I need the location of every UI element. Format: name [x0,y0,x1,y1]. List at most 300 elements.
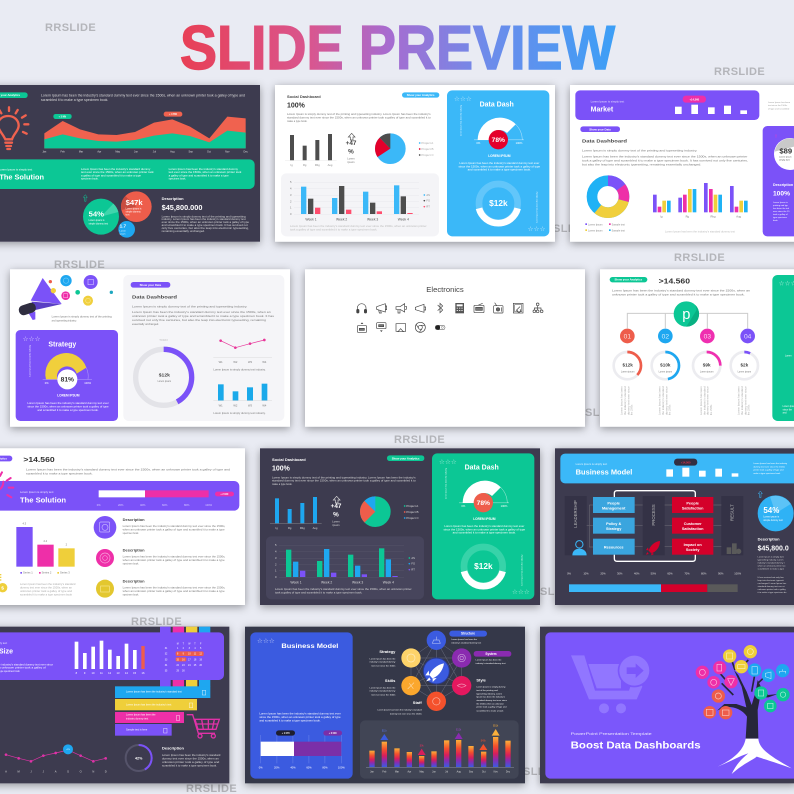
vertical captions: Lorem Ipsum has been [738,385,741,415]
body text: but also the leap into electronic typesetting, remaining essentially unchanged. [582,162,702,166]
process diagram: Strategy [606,527,622,531]
process diagram: People [607,501,620,505]
stat and description: when an unknown printer too [758,565,786,568]
pie legend [419,141,434,157]
area chart: Jul [153,150,156,153]
grouped bar chart: Lorem Ipsum has been the industry's standard dummy text [665,230,735,233]
banner: the solution: 0% [97,503,101,507]
grouped bar panel: RT [411,568,415,572]
bubble chart: text [126,213,130,216]
banner: the solution: 100% [205,503,213,507]
intro text: unknown printer took a galley of type and scrambled it to make a type specimen book. [612,292,745,296]
area chart: Nov [225,150,230,153]
bubble chart [83,191,152,238]
percent scale: 60% [667,572,673,576]
cover title [571,731,701,751]
cover title: Boost Data Dashboards [571,740,701,751]
stacked bar chart: Mar [395,770,399,773]
network labels: typesetting industry. Lorem [476,692,502,695]
panel: slide 10 market size [0,627,229,783]
panel: description purple: $89 [779,147,792,156]
bar chart: 12 [108,671,112,675]
calendar: 9 [183,654,185,656]
heading: Social Dashboard [272,457,306,462]
panel: slide 7 the solution light [0,448,245,605]
calendar: 29 [176,671,180,673]
stat: +47% [346,133,357,164]
vertical captions: the 1500s [748,404,751,415]
stat and description: Lorem ipsum is [763,516,780,519]
banner: market: +14,560 [689,97,700,101]
percent scale [567,572,742,576]
org tree: 03 [704,333,711,340]
banner: the solution: 80% [184,503,190,507]
grouped bar panel: AS [426,193,430,197]
panel: slide 5 electronics icons [305,269,585,427]
banner: the solution: text ever since the 1500s, when an unknown printer took [169,171,242,174]
network labels: Lorem Ipsum has been the [476,658,502,661]
stacked bar chart: Dec [506,771,511,773]
grouped bar panel: Week 2 [321,580,332,584]
panel: blue business model: since the 1500s, when an unknown printer took a galley of type [259,716,341,719]
banner: business model: Business Model [576,470,632,477]
ring charts: $12k [622,362,633,367]
icon: coin: $ [1,586,4,592]
percent scale: 100% [734,572,742,576]
donut legend: Sample text [612,223,625,226]
cover title: PowerPoint Presentation Template [571,731,653,736]
megaphone caption [52,316,112,322]
stacked bar chart: Oct [482,770,486,773]
process diagram [565,491,743,561]
banner: business model [560,454,794,483]
heading: 14.560: >14.560 [23,455,55,464]
percent scale: 30% [617,572,623,576]
grouped bar panel: Week 4 [383,580,394,584]
description: only five centuries, but also the leap into electronic typesetting, [162,227,249,230]
calendar: F [200,643,202,645]
banner: the solution: The Solution [20,497,66,504]
bar chart small [285,134,337,167]
calendar tabs [160,627,210,687]
grouped bar panel: Week 3 [367,217,378,221]
area chart: Apr [97,150,101,153]
bar chart: 9 [84,671,86,675]
calendar: 35 [165,671,168,673]
bubble chart: simple dummy text [89,222,108,225]
calendar: 16 [182,659,185,661]
ring charts: $9k [703,362,711,367]
process diagram: People [686,501,699,505]
stacked bar chart: $9k [420,745,424,747]
ring: 42% [126,745,152,771]
icon row 2 [357,322,445,332]
bar chart: 2.4 [43,539,48,543]
calendar: 22 [176,665,180,667]
percent scale: 50% [651,572,657,576]
panel: description purple: printing and typ [773,204,789,207]
market side text: of type and scrambled [768,107,790,110]
stat and description [758,491,794,594]
panel: data dashboard: W1 [219,360,223,364]
panel: data dashboard: W4 [262,404,267,408]
calendar: 25 [194,665,197,667]
panel: description purple: Lorem Ipsum [779,156,792,159]
line chart: J [43,769,45,773]
panel: data dash: Lorem Ipsum has been the industry's standard dummy text ever [459,162,540,165]
banner: business model: printer took a galley of type and [753,469,784,472]
watermark: RRSLIDE labels: SLI [585,407,603,419]
stat: +47%: Lorem [332,519,341,523]
icon: result blocks [727,543,741,554]
panel: data dashboard: Data Dashboard [132,295,177,301]
panel: data dashboard: Lorem Ipsum is simply dummy text industry. [213,412,266,415]
vertical captions: dummy text ever since [744,385,747,415]
vertical captions: the 1500s [710,404,713,415]
panel: data dashboard: Lorem Ipsum is simply dummy text industry. [213,369,266,372]
panel: data dashboard: essentially unchanged. [132,322,159,326]
description: Description [162,746,184,751]
banner: business model: make a type specimen book [753,472,781,475]
calendar: 34 [165,665,168,667]
description row 2: specimen book. [123,564,139,566]
panel: data dash: 0% [476,141,481,145]
calendar: 17 [188,659,191,661]
description: and scrambled it to make a type specimen book. It has survived not [162,224,248,227]
network labels: industry's standard dummy [370,690,396,693]
calendar: 2 [183,648,185,650]
description row 3: Description [123,578,145,583]
calendar: 4 [194,648,196,650]
bar chart small: Ig [291,163,293,167]
heading [287,94,321,110]
panel: data dash: Lorem Ipsum has been the industry [444,468,447,499]
stacked bar chart: Jan [370,771,375,773]
panel: data dash: Data Dash [465,464,499,471]
funnel blocks [115,686,210,736]
grouped bar panel: RT [426,205,430,209]
banner: business model: Lorem Ipsum has been the industry [753,462,788,465]
panel: description purple: book [773,220,779,222]
network labels: Lorem Ipsum is simply dummy [476,686,506,689]
panel: data dash [447,90,549,236]
heading: 100% [272,466,291,473]
panel: description purple: 100% [773,191,790,198]
stat and description: unknown printer took a galley [758,588,787,591]
calendar: 3 [189,648,191,650]
line chart: O [80,769,82,773]
bar chart: unknown printer took a galley of type and [20,590,73,593]
calendar: T [183,643,185,645]
process diagram: Customer [684,522,702,526]
banner: the solution: Lorem Ipsum has been the industry's standard dummy [81,168,151,171]
stat and description: It has survived not only five [758,576,784,579]
description row 1: Description [123,517,145,522]
calendar: T [194,643,196,645]
description row 2: Lorem Ipsum has been the industry's standard dummy text ever since the 1500s, [123,556,226,559]
grouped bar panel: 1 [290,206,292,210]
network labels: Lorem Ipsum has been the [451,638,478,641]
panel: green side: since the [783,408,793,411]
vertical captions: dummy text ever since [707,385,710,415]
stat: +47%: ipsum [332,523,340,527]
bubble chart: ipsum [120,234,126,236]
panel: description purple: simply dum [779,160,790,162]
panel: data dashboard: unknown printer took a galley of type and scrambled it to make a type specimen book. It has [132,314,275,318]
panel: strategy: Lorem Ipsum has been the industry's standard dummy text ever [27,402,109,405]
panel: strategy [16,330,118,421]
bar chart: 8 [76,671,78,675]
panel: description purple: has been the ind [773,207,790,210]
panel: strategy: and scrambled it to make a type specimen book. [37,409,99,412]
area chart: Aug [170,150,175,153]
grouped bar panel: took a galley of type and scrambled it to make a type specimen book. [275,592,363,595]
heading: Social Dashboard [287,94,321,99]
panel: slide 4 strategy light [10,269,290,427]
watermark: RRSLIDE labels: RRSLIDE [674,252,725,264]
icon: light bulb [0,107,28,149]
analytics pill: Show your Analytics [614,278,643,282]
line chart [5,744,107,773]
stat: +47%: +47 [346,140,357,147]
watermark: RRSLIDE labels: RRSLIDE [45,22,96,34]
grouped bar panel: 5 [275,543,277,547]
description row 3: specimen book. [123,594,139,596]
panel: data dash: LOREM IPSUM [488,154,511,158]
panel: data dashboard [123,275,284,421]
description row 2 [96,548,226,567]
panel: data dash: $12k [474,561,493,571]
grouped bar chart: Ig [660,215,663,219]
vertical captions: the 1500s [631,404,634,415]
panel: data dash: Lorem Ipsum has been the industry [459,105,462,136]
grouped bar chart: Rbg [711,215,716,219]
org tree [620,301,755,343]
panel: green side: Lorem [785,354,792,357]
banner: size: a unknown printer took a galley of [0,666,46,669]
heading [272,457,306,473]
calendar: M [177,643,179,645]
grouped bar panel: FG [426,199,430,203]
panel: data dashboard: Lorem ipsum [158,380,171,383]
network labels: industry's standard dummy text [476,662,506,665]
icon row 1 [357,303,543,313]
banner: size: e industry's standard dummy text ever since [0,663,54,666]
line chart: +2% [66,749,70,751]
donut chart [592,181,624,213]
bar chart small: Rbg [300,526,305,530]
line chart: J [30,769,32,773]
ring charts: Lorem ipsum [738,370,751,373]
description row 3: when an unknown printer took a galley of type and scrambled it to make a type [123,590,226,593]
intro text: standard dummy text ever since the 1500s, when an unknown printer took a galley of type and scrambled it to [272,480,416,483]
grouped bar panel: 2 [275,562,277,566]
description [162,746,221,768]
calendar: 24 [188,665,191,667]
intro text: standard dummy text ever since the 1500s, when an unknown printer took a galley of type and scrambled it to [287,116,431,119]
panel: strategy: LOREM IPSUM [57,394,80,398]
stat and description: industry's standard dummy t [758,562,785,565]
banner: the solution: 40% [140,503,146,507]
network labels: text of the printing and [476,689,498,692]
percent scale: 80% [701,572,707,576]
panel: strategy: 0% [45,381,49,385]
panel: description purple [763,126,794,236]
vertical captions: the industry's standard [703,385,706,415]
panel: data dash [432,453,534,599]
grouped bar panel: 4 [290,187,292,191]
network labels: dummy text ever since the 1500s [390,712,422,715]
panel: data dash: 100% [501,504,508,508]
org tree: 01 [624,333,631,340]
panel: data dash: ☆☆☆ [528,225,546,233]
calendar: 5 [200,648,202,650]
panel: strategy: ☆☆☆ [23,335,41,343]
network labels: Strategy [379,649,396,654]
panel: blue business model: Lorem Ipsum has been the industry's standard dummy text ever [259,713,341,716]
vertical captions: the industry's standard [741,385,744,415]
description row 1: when an unknown printer took a galley of type and scrambled it to make a type [123,528,226,531]
panel: blue business model: 60% [306,765,312,769]
network diagram [401,631,471,711]
network labels: industry's standard dummy text [451,642,482,645]
description row 1: Lorem Ipsum has been the industry's standard dummy text ever since the 1500s, [123,525,226,528]
percent scale: 70% [684,572,690,576]
vertical captions: Lorem Ipsum has been [659,385,662,415]
line chart: M [18,769,20,773]
vertical captions: the industry's standard [662,385,665,415]
banner: the solution: + 2 840 [220,493,229,496]
network labels: industry's standard dummy [370,661,396,664]
calendar: W [188,643,191,645]
icon: rocket [646,541,660,555]
grouped bar panel: Lorem Ipsum has been the industry's standard dummy text ever since the 1500s, when an unknown printer [275,588,412,591]
process diagram: Management [602,506,626,510]
grouped bar panel [281,173,439,236]
stat and description: standard dummy text ever si [758,585,785,588]
description row 1: specimen book. [123,533,139,535]
banner: market: Market [591,107,614,114]
vertical captions [621,385,751,415]
stacked bar chart: Jun [432,771,437,773]
stat and description: typesetting industry. Lorem [758,559,784,562]
panel: green side [772,275,794,421]
banner: the solution: The Solution [0,175,44,182]
panel: blue business model: 0% [259,765,263,769]
panel: data dash: 0% [461,504,466,508]
stacked bar chart: Jul [445,771,449,773]
grouped bar panel: AS [411,556,415,560]
calendar: 19 [199,659,203,661]
network labels: System [485,652,497,656]
description: Description [162,196,184,201]
analytics pill [610,277,647,282]
area chart: + 3 NN [59,116,66,118]
org tree: 04 [744,333,752,340]
donut legend: Sample text [612,229,625,232]
grouped bar panel: 2 [290,199,292,203]
panel: data dashboard: W1 [219,404,223,408]
description row 3: Lorem Ipsum has been the industry's standard dummy text ever since the 1500s, [123,586,226,589]
intro text: make a type book. [272,483,293,486]
pie legend: Project A [421,141,433,145]
intro text [287,113,432,123]
stat: +47% [331,496,342,527]
funnel blocks: Sample text is here [126,729,148,732]
bubble chart: simple dummy [126,211,142,213]
stat and description: unchanged. Lorem Ipsum has [758,582,786,585]
bar chart: dummy text ever since the 1500s, when an [20,586,73,589]
bubble chart: Lorem ipsum is [89,219,105,222]
bar chart: Series 2 [42,571,52,575]
stat and description: $45,800.0 [758,546,789,553]
stacked bar chart: Nov [494,771,499,773]
network labels: Structure [461,632,475,636]
grouped bar panel: 3 [290,193,292,197]
panel: data dash: Lorem Ipsum has been the industry's standard dummy text ever [444,525,525,528]
banner: the solution: a galley of type and scrambled it to make a type [169,174,229,177]
description: Lorem Ipsum is simply dummy text of the printing and typesetting [162,215,246,218]
stacked bar chart [360,720,519,779]
calendar: 12 [199,654,203,656]
panel: data dashboard: W2 [233,360,238,364]
panel: data dashboard: Lorem Ipsum is simply dummy text of the printing and typesetting industry. [132,304,248,308]
panel: data dashboard: W4 [262,360,267,364]
panel: blue business model: ☆☆☆ [257,637,275,645]
pie legend: Project C [421,153,434,157]
panel: data dash: Data Dash [480,101,514,108]
bubble chart: 1.7 [120,224,127,229]
network labels: Skills [385,678,396,683]
watermark: RRSLIDE labels: RRSLIDE [54,259,105,271]
panel: data dash: Lorem Ipsum has been the industry [521,555,524,586]
panel: description purple: Description [773,183,793,187]
network labels: Style [476,678,487,683]
icon: faded cart [571,654,651,713]
megaphone caption: Lorem Ipsum is simply dummy text of the printing [52,316,112,319]
pie chart [383,141,398,156]
intro text [272,476,417,486]
panel: description purple: took a galley of [773,213,788,216]
banner: the solution: specimen book. [81,178,99,181]
description row 1 [94,516,226,539]
line chart: A [55,769,57,773]
stat: +47%: % [348,148,354,155]
icon: megaphone [18,278,62,320]
bubble chart: Lorem [120,229,126,232]
description: Lorem Ipsum has been the industry's standard [162,754,221,757]
bar chart: 16 [142,671,145,675]
bar chart small: Aug [313,526,318,530]
stacked bar chart: $11k [382,731,388,733]
pie legend: Project B [406,510,418,514]
panel: slide 6 analytics rings [600,269,794,427]
calendar: 15 [176,659,180,661]
grouped bar panel: Week 1 [305,217,317,221]
panel: description purple: Lorem Ipsum is [773,201,788,204]
intro text: make a type book. [287,120,308,123]
panel: data dash: 78% [477,500,490,507]
watermark: RRSLIDE labels: RRSLIDE [394,434,445,446]
org tree: p [682,307,690,323]
calendar: 26 [199,665,203,667]
watermark: RRSLIDE labels: SLI [553,223,571,235]
panel: blue business model: 40% [290,765,296,769]
panel: data dash: since the 1500s, when an unknown printer took a galley of type [443,528,526,531]
analytics pill: Show your Analytics [392,456,420,460]
panel: data dashboard: TODAY [159,338,168,342]
panel: data dash: 78% [492,137,505,144]
